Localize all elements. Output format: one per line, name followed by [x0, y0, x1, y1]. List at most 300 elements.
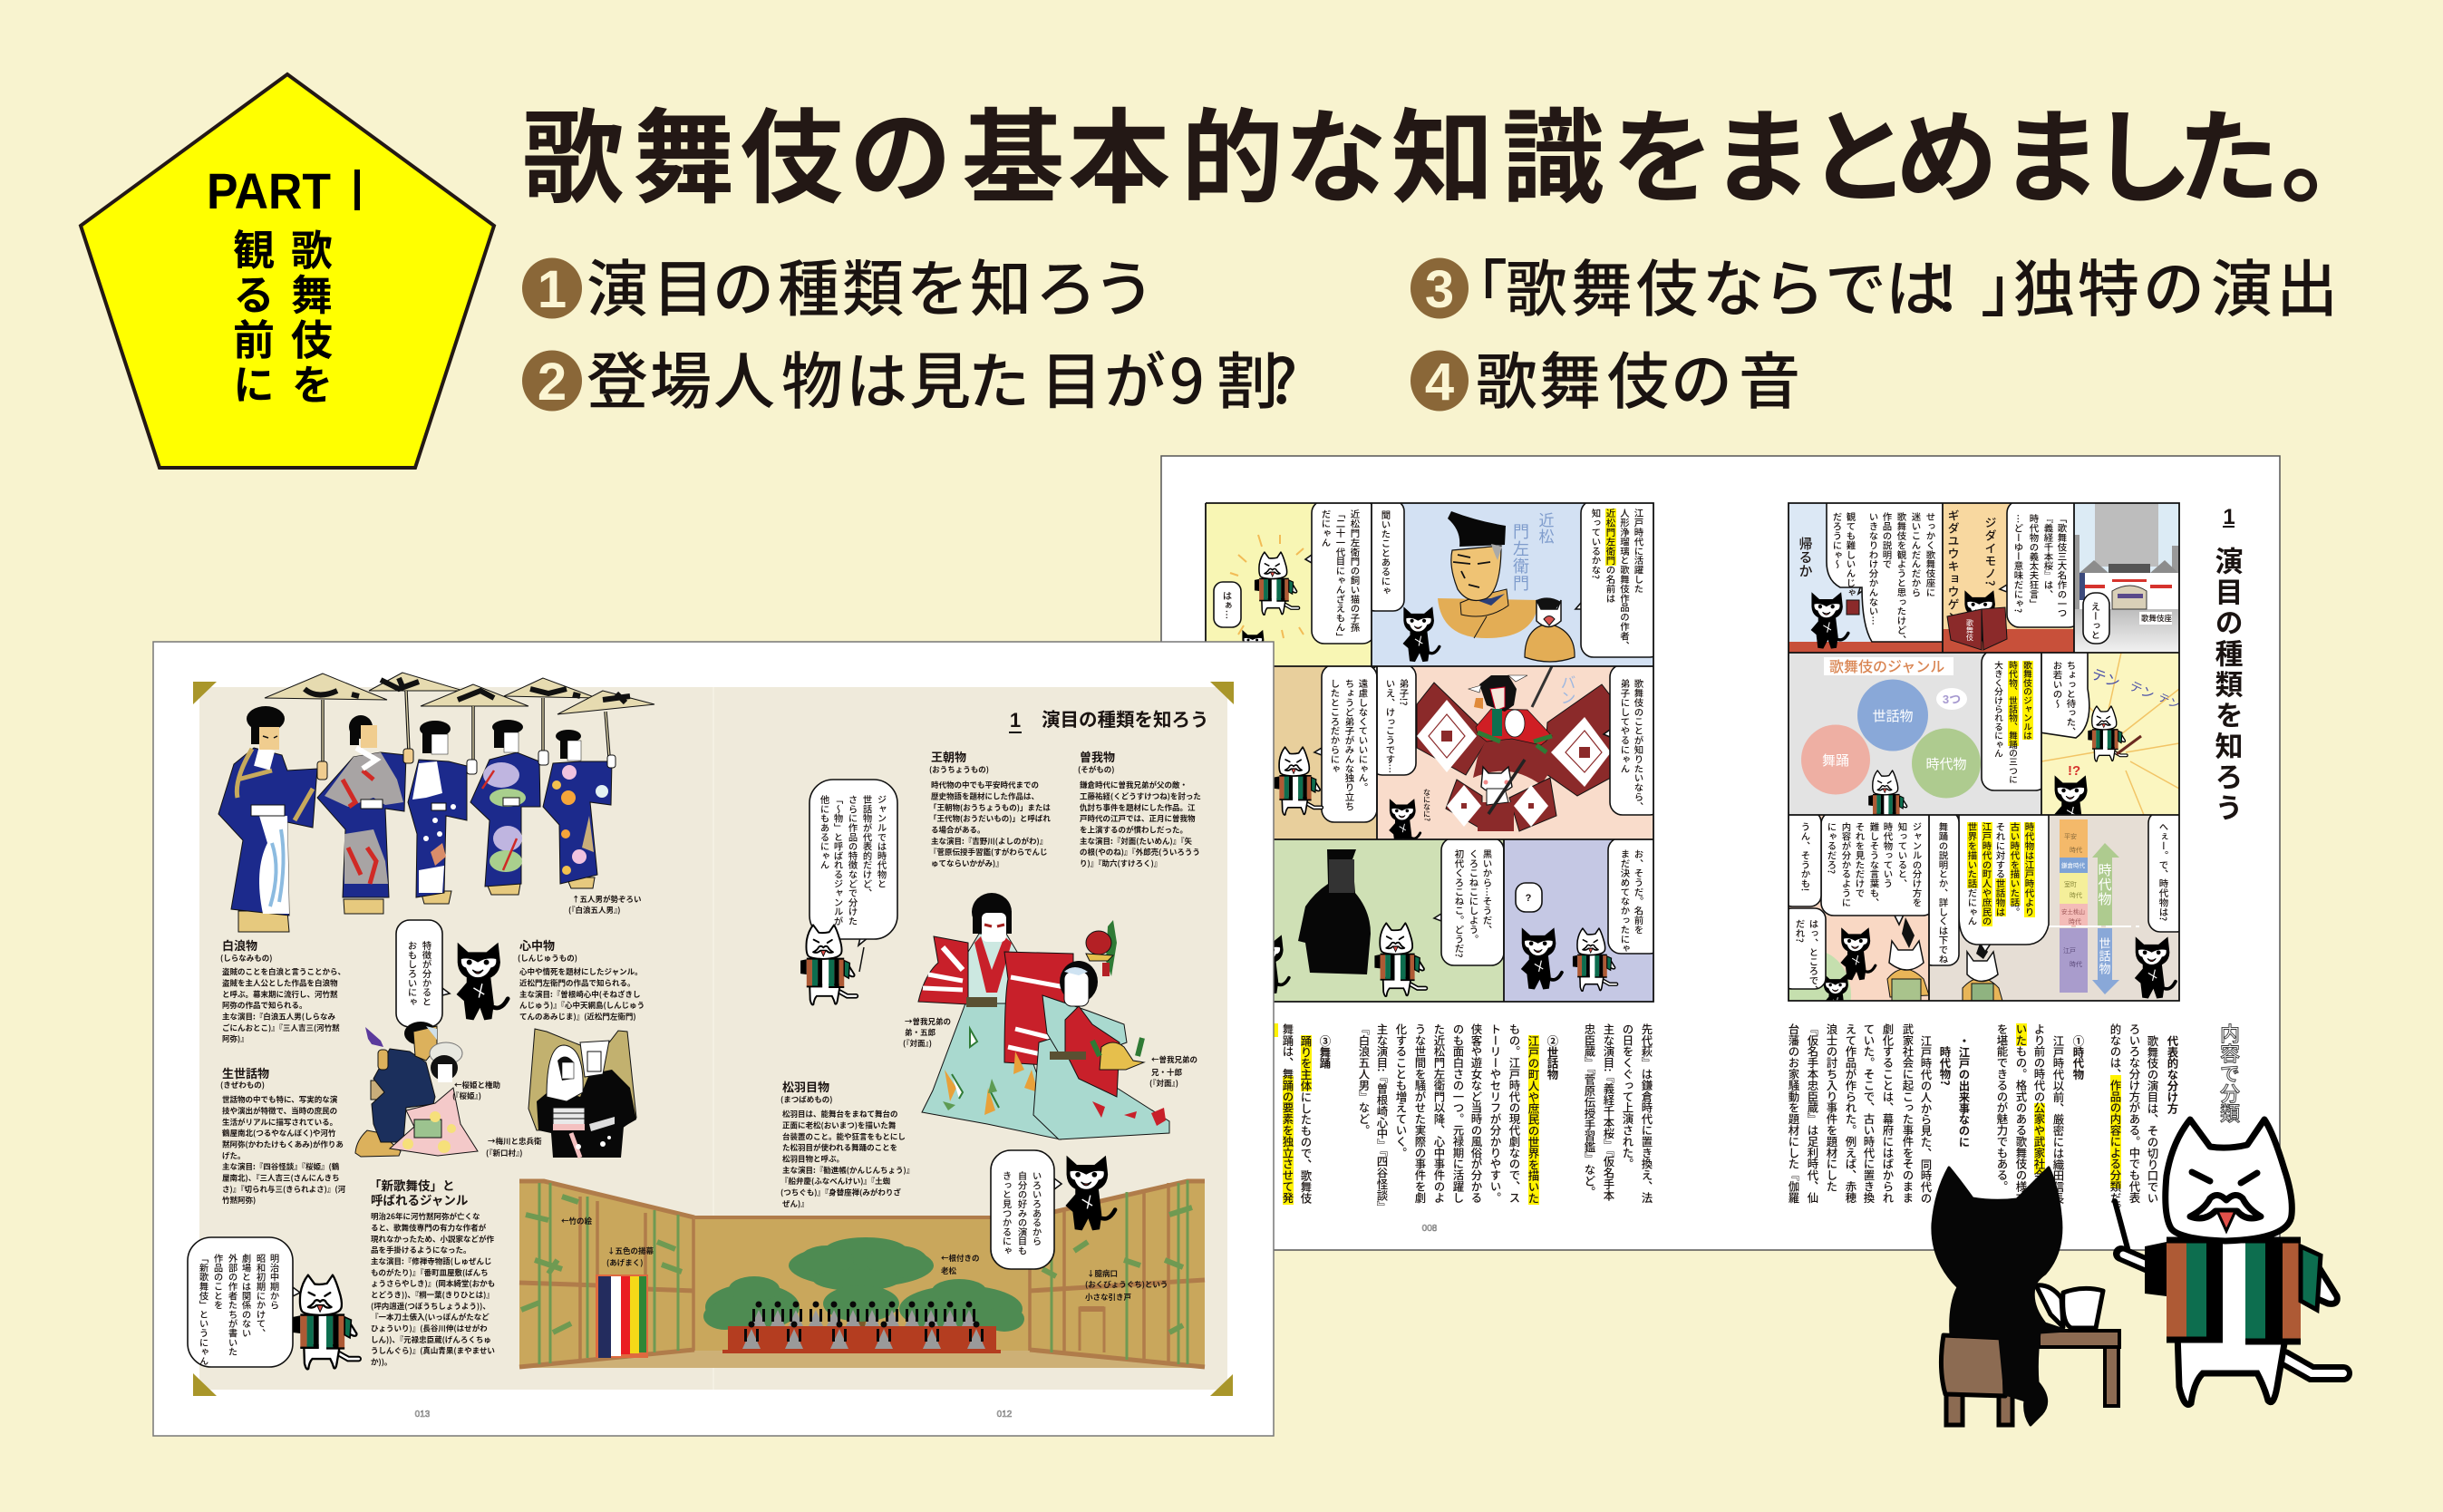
bubble: name: [1607, 839, 1653, 955]
stage captions: ←竹の絵: [561, 1216, 593, 1226]
text block: right columns of body copy: 劇化することは、幕府にはばかられ: [1880, 1023, 1896, 1203]
text block: matsubamemono: 主な演目:『勧進帳(かんじんちょう)』: [782, 1165, 914, 1176]
text block: ochomono: る場合がある。: [931, 825, 985, 836]
text block: shin-kabuki: ょうさらやしき)』(岡本綺堂(おかも: [371, 1278, 495, 1289]
small cat in mound: [1823, 974, 1853, 1018]
era bars: 鎌倉時代: [2061, 861, 2085, 869]
text block: shiranamimono: 阿弥の作品で知られる。: [222, 1000, 307, 1011]
text block: shin-kabuki: ると、歌舞伎専門の有力な作者が: [371, 1222, 487, 1233]
desk: [2039, 1331, 2119, 1406]
label: Kabukiza: [2139, 612, 2173, 625]
box item: [1100, 1042, 1144, 1070]
bubble: you will find: 自分の好みの演目も: [1015, 1170, 1030, 1255]
caption: Sakura-hime: ←桜姫と権助: [454, 1080, 500, 1090]
bubble: if you know genres: 内容が分かるように: [1840, 821, 1853, 907]
bubble: if you know genres: 難しそうな言葉も、: [1867, 821, 1882, 907]
bubble: there are others: 世話物が代表的だけど、: [861, 795, 874, 897]
bubble: 歌舞伎を観ようと思ったけど、: [1895, 511, 1909, 645]
text block: left columns of body copy: うな世間を騒がせた実際の事件を劇: [1412, 1023, 1429, 1204]
text block: sogamono: 曽我物: [1080, 748, 1115, 765]
bubble: shin-kabuki explanation: 明治中期から: [268, 1254, 281, 1311]
bubble: features are interesting: 特徴が分かると: [421, 940, 433, 1006]
back wall: [694, 1216, 1030, 1351]
text block: shiranamimono: 主な演目:『白浪五人男(しらなみ: [222, 1012, 335, 1023]
kimono cat: [1887, 917, 1929, 1001]
list: four topics: [522, 239, 2338, 422]
text block: shin-kabuki: 主な演目:『修禅寺物語(しゅぜんじ: [371, 1256, 491, 1267]
portrait name: 門左衛門: [1509, 523, 1533, 592]
portrait name: 近松: [1536, 512, 1557, 545]
text block: shiranamimono: (しらなみもの): [220, 953, 272, 964]
text block: shin-kabuki: (坪内逍遥(つぼうちしょうよう))、: [371, 1301, 490, 1312]
bubble: if you know genres: それを見ただけで: [1853, 822, 1867, 897]
text block: kizewamono: 技や演出が特徴で、当時の庶民の: [222, 1106, 337, 1117]
text block: shiranamimono: [220, 936, 345, 1044]
genre circle: buyou: 舞踊: [1822, 753, 1849, 769]
caption: Juro: [1149, 1054, 1197, 1089]
bubble: um: えーっと: [2089, 602, 2103, 640]
caption: Goro: →曽我兄弟の: [905, 1016, 951, 1027]
text block: kizewamono: 屋南北)、『三人吉三(さんにんきち: [222, 1173, 340, 1184]
label: Kabukiza: 歌舞伎座: [2141, 614, 2173, 623]
bubble: who: はっ、ところで、: [1808, 919, 1820, 994]
text block: sogamono: 戸時代の江戸では、正月に曽我物: [1080, 813, 1196, 824]
text block: left columns of body copy: 化することも増えていく。: [1393, 1023, 1410, 1158]
beige page background: [199, 687, 1227, 1390]
black cat: [1403, 606, 1440, 662]
caption: five men: ↑五人男が勢ぞろい: [572, 894, 642, 905]
bubble: haa: [1214, 582, 1241, 627]
text block: ochomono: 歴史物語を題材にした作品は、: [931, 790, 1039, 801]
bubble: there are others: [809, 780, 897, 945]
chapter heading: 1: [1010, 709, 1021, 732]
bubble: shin-kabuki explanation: 外部の作者たちが書いた: [227, 1253, 239, 1356]
bubble: 歌舞伎のジャンルは: [2021, 660, 2034, 740]
era bars: 平安: [2064, 833, 2077, 840]
text block: right columns of body copy: 的なのは、作品の内容による分類だ。: [2108, 1023, 2124, 1215]
bubble: shin-kabuki explanation: 昭和初期にかけて、: [254, 1254, 268, 1338]
comic frame 2: [1789, 503, 2179, 1001]
text block: left columns of body copy: の日をくぐって上演された。: [1620, 1023, 1636, 1169]
text block: right columns of body copy: ①時代物: [2070, 1035, 2087, 1081]
bubble: 時代物、世話物、舞踊の三つに: [2007, 660, 2020, 784]
stage captions: 小さな引き戸: [1085, 1292, 1131, 1303]
text block: right columns of body copy: ていた。そこで、古い時代に置き換: [1861, 1023, 1877, 1204]
corner marks: [193, 682, 1234, 1396]
portrait name: [1513, 513, 1554, 591]
illustration: teacher cat with pointer: [2115, 1119, 2343, 1405]
Juro robe: [1033, 1024, 1169, 1139]
text block: left columns of body copy: 江戸の町人や庶民の世界を描いた: [1526, 1035, 1542, 1204]
illustration: Matsubame stage: [519, 1180, 1205, 1368]
sound effect: ten ten ten: [2089, 667, 2181, 712]
bubble: 「二十一代目にゃんざえもん」: [1334, 509, 1347, 642]
text block: kizewamono: 世話物の中でも特に、写実的な演: [222, 1094, 338, 1105]
text block: right columns of body copy: ろいろな分け方がある。中でも代表: [2127, 1023, 2143, 1204]
pine tree: [703, 1237, 1024, 1333]
elder item: [1086, 920, 1117, 976]
text block: matsubamemono: 台装置のこと。能や狂言をもとにし: [782, 1131, 906, 1142]
text block: left columns of body copy: 『白浪五人男』など。: [1356, 1023, 1372, 1136]
bubble: explanation: [1959, 811, 2049, 952]
panel: row 1 middle: ギダユウキョウゲン?: [1945, 509, 1962, 630]
bubble: explanation: 時代物は江戸時代より: [2023, 821, 2036, 916]
bubble: name: お、そうだ。名前を: [1632, 849, 1646, 935]
bubble: heard of it: [1372, 504, 1405, 612]
text block: right columns of body copy: 浪士の討ち入り事件を題材にした: [1824, 1023, 1840, 1192]
text block: shiranamimono: 盗賊のことを白浪と言うことから、: [222, 966, 345, 977]
text block: ochomono: 『菅原伝授手習鑑(すがわらでんじ: [929, 847, 1047, 858]
black cat ears: [1242, 629, 1264, 642]
text block: right columns of body copy: えて作品が作られた。例えば、赤穂: [1843, 1023, 1859, 1204]
text block: right columns of body copy: [1786, 1023, 2244, 1215]
text block: shin-kabuki: 『一本刀土俵入(いっぽんがたなど: [371, 1312, 490, 1323]
era bars: 時代: [2070, 846, 2082, 854]
text block: sogamono: 主な演目:『対面(たいめん)』『矢: [1080, 836, 1192, 847]
bubble: and jidaimono?: へぇー。で、時代物は?: [2157, 822, 2170, 921]
white cat: [1868, 771, 1908, 828]
black cat on stage wall: [1065, 1156, 1115, 1230]
bubble: 大きく分けられるにゃん: [1992, 660, 2005, 758]
bubble: if you know genres: [1821, 811, 1935, 925]
panel: yellow, descendant: [1206, 500, 1375, 669]
chapter title vertical: 1: [2223, 505, 2235, 529]
text block: sogamono: 鎌倉時代に曽我兄弟が父の敵・: [1080, 780, 1188, 790]
bubble: 『義経千本桜』は、: [2041, 514, 2056, 599]
bubble: くろこねこにしよう。: [1467, 849, 1481, 944]
bubble: shin-kabuki explanation: [188, 1237, 300, 1367]
text block: kizewamono: 竹黙阿弥): [222, 1195, 256, 1206]
text block: ochomono: (おうちょうもの): [929, 764, 989, 775]
text block: right columns of body copy: を堪能できるのが魅力でもある。: [1994, 1023, 2011, 1192]
bubble: features are interesting: [396, 920, 450, 1027]
bubble: there are others: 他にもあるにゃん: [818, 794, 832, 869]
bubble: [1982, 650, 2048, 790]
pentagon badge: PART I: 観る前に: [224, 228, 284, 408]
text block: right columns of body copy: 江戸時代の人から見た、同時代の: [1918, 1035, 1934, 1204]
text block: sogamono: 仇討ち事件を題材にした作品。江: [1080, 802, 1196, 813]
item 2: 登場人物は見た目が9割?: [587, 332, 1297, 422]
text block: kizewamono: (きぜわもの): [220, 1080, 265, 1090]
figure 2: [317, 715, 413, 914]
text block: matsubamemono: (つちぐも)』『身替座禅(みがわりざ: [780, 1187, 901, 1198]
item 1: 1: [538, 260, 567, 319]
pentagon badge: PART I: 歌舞伎を: [282, 228, 342, 408]
white cat: [1374, 923, 1426, 996]
era bars: 時代: [2070, 891, 2082, 899]
right wall: [1030, 1180, 1205, 1368]
bubble: question: 近松門左衛門の名前は: [1604, 508, 1617, 603]
figure 1: [218, 706, 327, 932]
text block: ochomono: 時代物の中でも平安時代までの: [931, 780, 1039, 790]
caption: Umegawa: [486, 1136, 542, 1158]
era bars: 江戸: [2063, 947, 2076, 955]
bubble: you will find: [991, 1150, 1062, 1269]
item 3: 3: [1425, 260, 1454, 319]
bubble: [1827, 500, 1949, 645]
text block: right columns of body copy: いたもの。格式のある歌舞伎の様式美: [2013, 1023, 2030, 1215]
illustration: black cat studying at desk: [1933, 1168, 2119, 1425]
illustration: Sakura-hime and Gonsuke: [355, 1022, 478, 1157]
bubble: question: 人形浄瑠璃と歌舞伎作品の作者、: [1618, 509, 1632, 650]
text block: shin-kabuki: 品を手掛けるようになった。: [371, 1245, 471, 1255]
genre circle: sewamono: [1857, 680, 1928, 751]
bubble: question mark: ?: [1526, 893, 1532, 904]
bubble: don't hold back: ちょうど弟子がみんな独り立ち: [1343, 679, 1356, 811]
text block: matsubamemono: 『船弁慶(ふなべんけい)』『土蜘: [780, 1176, 890, 1187]
text block: kizewamono: 黙阿弥(かわたけもくあみ)が作りあ: [222, 1139, 344, 1149]
stage captions: ←根付きの: [941, 1253, 980, 1264]
black cat: [1933, 1168, 2067, 1425]
bubble: disciple offer: 歌舞伎のことが知りたいなら、: [1632, 678, 1646, 811]
bubble: you will find: きっと見つかるにゃ: [1001, 1171, 1013, 1255]
bubble: don't hold back: したところだからにゃ: [1329, 679, 1342, 773]
stage captions: (おくびょうぐち)という: [1085, 1279, 1168, 1290]
text block: sogamono: (そがもの): [1078, 764, 1114, 775]
sound effect: バン: [1557, 674, 1579, 705]
text block: left columns of body copy: 主な演目:『義経千本桜』『仮名手本: [1601, 1023, 1617, 1201]
bubble: [1305, 500, 1375, 644]
text block: left columns of body copy: た近松門左衛門以降、心中事件のよ: [1431, 1023, 1448, 1203]
Goro robe: [922, 1003, 1061, 1139]
caption: Juro: (『対面』): [1149, 1078, 1178, 1089]
page number 008: 008: [1422, 1224, 1438, 1234]
caption: Sakura-hime: [452, 1080, 500, 1101]
text block: ochomono: 主な演目:『吉野川(よしのがわ)』: [931, 836, 1047, 847]
caption: Umegawa: →梅川と忠兵衛: [488, 1136, 542, 1147]
text block: shinjumono: (しんじゅうもの): [518, 953, 577, 964]
bubble: 観ても難しいんじゃ: [1844, 511, 1858, 597]
panel: wait a moment: [2040, 650, 2181, 835]
text block: shiranamimono: 盗賊を主人公とした作品を白浪物: [222, 977, 338, 988]
three badge: 3つ: [1943, 693, 1961, 706]
bubble: yes: うん、そうかも!: [1798, 822, 1813, 891]
text block: right columns of body copy: 『仮名手本忠臣蔵』は足利時代、仙: [1805, 1023, 1821, 1204]
bubble: 時代物の義太夫狂言」: [2027, 513, 2041, 608]
chapter heading: 演目の種類を知ろう: [1042, 704, 1209, 732]
panel: Kabukiza theatre: [2074, 503, 2179, 653]
text block: left columns of body copy: 先代萩』は鎌倉時代に置き換え、法: [1639, 1023, 1655, 1203]
bubble: no thanks: [1371, 664, 1416, 775]
bubble: [2000, 500, 2081, 627]
platform and musicians: [722, 1302, 1001, 1353]
bubble: shin-kabuki explanation: 作品のことを: [212, 1254, 225, 1310]
page numbers: 012: [997, 1410, 1013, 1420]
text block: sogamono: り)』『助六(すけろく)』: [1080, 858, 1161, 868]
bubble: disciple offer: 弟子にしてやるにゃん: [1619, 678, 1632, 773]
stage captions: ↓五色の揚幕: [607, 1245, 654, 1256]
three badge: [1936, 688, 1967, 710]
bubble: features are interesting: おもしろいにゃ: [406, 941, 419, 1006]
bubble: question: 知っているかな?: [1590, 508, 1603, 579]
handwriting: go home: 帰るか: [1797, 536, 1815, 577]
text block: kizewamono: 鶴屋南北(つるやなんぼく)や河竹: [222, 1128, 336, 1139]
text block: matsubamemono: 正面に老松(おいまつ)を描いた舞: [782, 1120, 897, 1131]
text block: left columns of body copy: 踊りを主体にしたもので、歌舞伎: [1298, 1035, 1314, 1205]
text block: matsubamemono: [780, 1078, 914, 1209]
text block: left columns of body copy: トーリーやセリフが分かりやすい。: [1488, 1023, 1504, 1203]
bubble: and jidaimono?: [2148, 811, 2188, 932]
text block: kizewamono: [220, 1064, 346, 1206]
chapter title vertical: 演目の種類を知ろう: [2208, 547, 2250, 824]
text block: ochomono: [929, 748, 1051, 868]
text block: shinjumono: 主な演目:『曽根崎心中(そねざきし: [519, 989, 640, 1000]
bubble: question: [1574, 504, 1653, 658]
caption: five men: (『白浪五人男』): [568, 905, 620, 916]
cat with red book: [1947, 590, 2007, 650]
text block: shinjumono: 心中物: [519, 936, 555, 954]
bubble: who: [1781, 908, 1826, 994]
black cat: [2135, 936, 2176, 999]
text block: kizewamono: 生世話物: [222, 1064, 269, 1081]
text block: shinjumono: んじゅう)』『心中天網島(しんじゅう: [519, 1000, 645, 1011]
arrow: jidaimono: [2092, 843, 2119, 926]
text block: shin-kabuki: か))。: [371, 1356, 392, 1367]
curtain: [596, 1275, 648, 1358]
text block: shin-kabuki: 「新歌舞伎」と: [369, 1176, 455, 1194]
bubble: question: 江戸時代に活躍した: [1632, 509, 1646, 594]
figure 5: [543, 730, 616, 888]
era bars: 安土桃山: [2061, 907, 2085, 916]
genre circle: jidaimono: [1912, 729, 1981, 798]
item 4: 4: [1425, 353, 1454, 412]
bubble: 黒いから…そうだ、: [1481, 849, 1494, 935]
text block: right columns of body copy: 台藩のお家騒動を題材にした『伽羅: [1786, 1023, 1802, 1204]
genre title: 歌舞伎のジャンル: [1829, 659, 1944, 675]
comic frame 1: [1206, 503, 1653, 1002]
text block: shiranamimono: ごにんおとこ)』『三人吉三(河竹黙: [222, 1023, 340, 1033]
sound effect: ten ten ten: テン: [2128, 678, 2157, 703]
bubble: explanation: 古い時代を描いた話。: [2009, 821, 2021, 916]
caption: Sakura-hime: (『桜姫』): [452, 1090, 481, 1101]
text block: shin-kabuki: 現れなかったため、小説家などが作: [371, 1234, 495, 1245]
bubble: you will find: いろいろあるから: [1030, 1171, 1044, 1246]
left book page: [153, 642, 1274, 1436]
bubble: there are others: 「〜物」と呼ばれるジャンルが: [832, 795, 845, 926]
bubble: wait: [2040, 650, 2089, 738]
text block: matsubamemono: た松羽目が使われる舞踊のことを: [782, 1142, 897, 1153]
text block: ochomono: 王朝物: [931, 748, 966, 765]
black cat: [1389, 799, 1420, 846]
text block: sogamono: を上演するのが慣わしだった。: [1080, 825, 1188, 836]
text block: left columns of body copy: ②世話物: [1545, 1035, 1561, 1081]
text block: shinjumono: てんのあみじま)』(近松門左衛門): [519, 1012, 636, 1023]
era bars: 時代: [2069, 917, 2081, 926]
text block: kizewamono: げた。: [222, 1150, 246, 1161]
bubble: no thanks: 弟子!?: [1398, 678, 1411, 705]
exclamation: !?: [2068, 763, 2080, 779]
text block: right columns of body copy: 歌舞伎の演目は、その切り口でい: [2145, 1034, 2161, 1204]
sound effect: ten ten ten: テン: [2157, 691, 2181, 712]
black cat with book: [1811, 592, 1859, 649]
era bars: [2060, 819, 2088, 993]
stage captions: 老松: [941, 1265, 957, 1276]
bubble: there are others: ジャンルでは時代物と: [876, 795, 888, 888]
item 3: 「歌舞伎ならでは!」独特の演出: [1446, 239, 2338, 329]
open book: [2036, 1285, 2103, 1328]
bubble: question mark: [1516, 883, 1542, 912]
illustration: five men with umbrellas: [218, 673, 654, 932]
text block: sogamono: 工藤祐経(くどうすけつね)を討った: [1080, 790, 1201, 801]
panel: row 1 left: [1789, 500, 1949, 653]
text block: matsubamemono: 松羽目物: [782, 1078, 829, 1095]
bubble: だにゃん: [1320, 509, 1333, 548]
floor: [519, 1351, 1205, 1368]
era bars: 室町: [2064, 880, 2077, 888]
text block: left columns of body copy: のも面白さの一つ。元禄期に活躍し: [1450, 1023, 1467, 1203]
heading: classification: 内容で分類: [2215, 1023, 2244, 1123]
bubble: yes: [1781, 811, 1821, 906]
murmur text: なになに?: [1421, 789, 1432, 821]
bubble: だろうにゃ〜: [1831, 512, 1844, 568]
caption: Umegawa: (『新口村』): [486, 1148, 522, 1158]
Chikamatsu figure: [1438, 511, 1538, 638]
text block: shin-kabuki: うしんぐら)』(真山青果(まやませい: [371, 1345, 495, 1356]
white cat: [1573, 928, 1616, 991]
black cat behind: [1840, 927, 1876, 980]
text block: left columns of body copy: 忠臣蔵』『菅原伝授手習鑑』など。: [1582, 1023, 1598, 1197]
bubble: if you know genres: 時代物っていう: [1882, 821, 1895, 888]
text block: shiranamimono: 白浪物: [222, 936, 257, 954]
caption: Goro: (『対面』): [903, 1038, 932, 1049]
bubble: 作品の説明で: [1880, 512, 1895, 568]
partial black cat: [1275, 935, 1291, 993]
cat with red book: 歌舞伎: [1965, 618, 1974, 642]
black cat: [2054, 775, 2093, 835]
panel: Chikamatsu portrait: [1364, 500, 1663, 666]
figure 4: [470, 720, 548, 895]
text block: matsubamemono: (まつばめもの): [780, 1094, 832, 1105]
panel: row 3 left: [1775, 811, 1935, 1041]
title: 歌舞伎の基本的な知識をまとめました。: [522, 75, 2383, 224]
bubble: details below: [1922, 811, 1959, 965]
white cat with pointer: [800, 925, 864, 1004]
kabuki costume: [1417, 666, 1611, 796]
text block: shin-kabuki: しん))、『元禄忠臣蔵(げんろくちゅ: [371, 1334, 491, 1345]
arrow: sewamono: [2092, 928, 2119, 994]
bubble: details below: 舞踊の説明とか、詳しくは下でね: [1936, 821, 1951, 964]
text block: left columns of body copy: 舞踊は、舞踊の要素を独立させて発: [1280, 1023, 1296, 1204]
caption: Goro: 弟・五郎: [905, 1027, 936, 1038]
bubble: there are others: さらに作品の特徴などで分けた: [847, 795, 859, 926]
text block: left columns of body copy: ③舞踊: [1317, 1035, 1333, 1070]
umbrellas: [265, 673, 654, 761]
text block: kizewamono: 主な演目:『四谷怪談』『桜姫』(鶴: [222, 1161, 340, 1172]
item 1: 演目の種類を知ろう: [587, 239, 1155, 329]
arrow: jidaimono: 時代物: [2096, 863, 2114, 906]
page numbers: 013: [415, 1410, 431, 1420]
bubble: explanation: 江戸時代の町人や庶民の: [1980, 822, 1994, 926]
caption: Juro: 兄・十郎: [1151, 1067, 1183, 1078]
white cat: [1255, 552, 1298, 615]
text block: right columns of body copy: より前の時代の公家や武家社会を描: [2031, 1023, 2048, 1204]
kuroko figure: [1298, 849, 1371, 974]
text block: ochomono: 「王代物(おうだいもの)」と呼ばれ: [929, 813, 1051, 824]
bubble: heard of it: 聞いたことあるにゃ: [1380, 510, 1392, 596]
genre circle: buyou: [1801, 725, 1870, 794]
bubble: 初代くろこねこ。どうだ?: [1452, 848, 1467, 958]
chair: [1941, 1335, 2012, 1425]
item 4: 歌舞伎の音: [1476, 332, 1800, 422]
white cat: [1275, 747, 1322, 815]
bubble: wait: ちょっと待った、: [2065, 661, 2078, 736]
bubble: [1434, 838, 1504, 965]
text block: shin-kabuki: 呼ばれるジャンル: [371, 1190, 469, 1208]
bubble: wait: お若いの〜: [2050, 661, 2065, 708]
illustration: Umegawa and Chubei: [528, 1029, 636, 1158]
text block: sogamono: [1078, 748, 1201, 868]
genre circle: jidaimono: 時代物: [1925, 757, 1967, 772]
